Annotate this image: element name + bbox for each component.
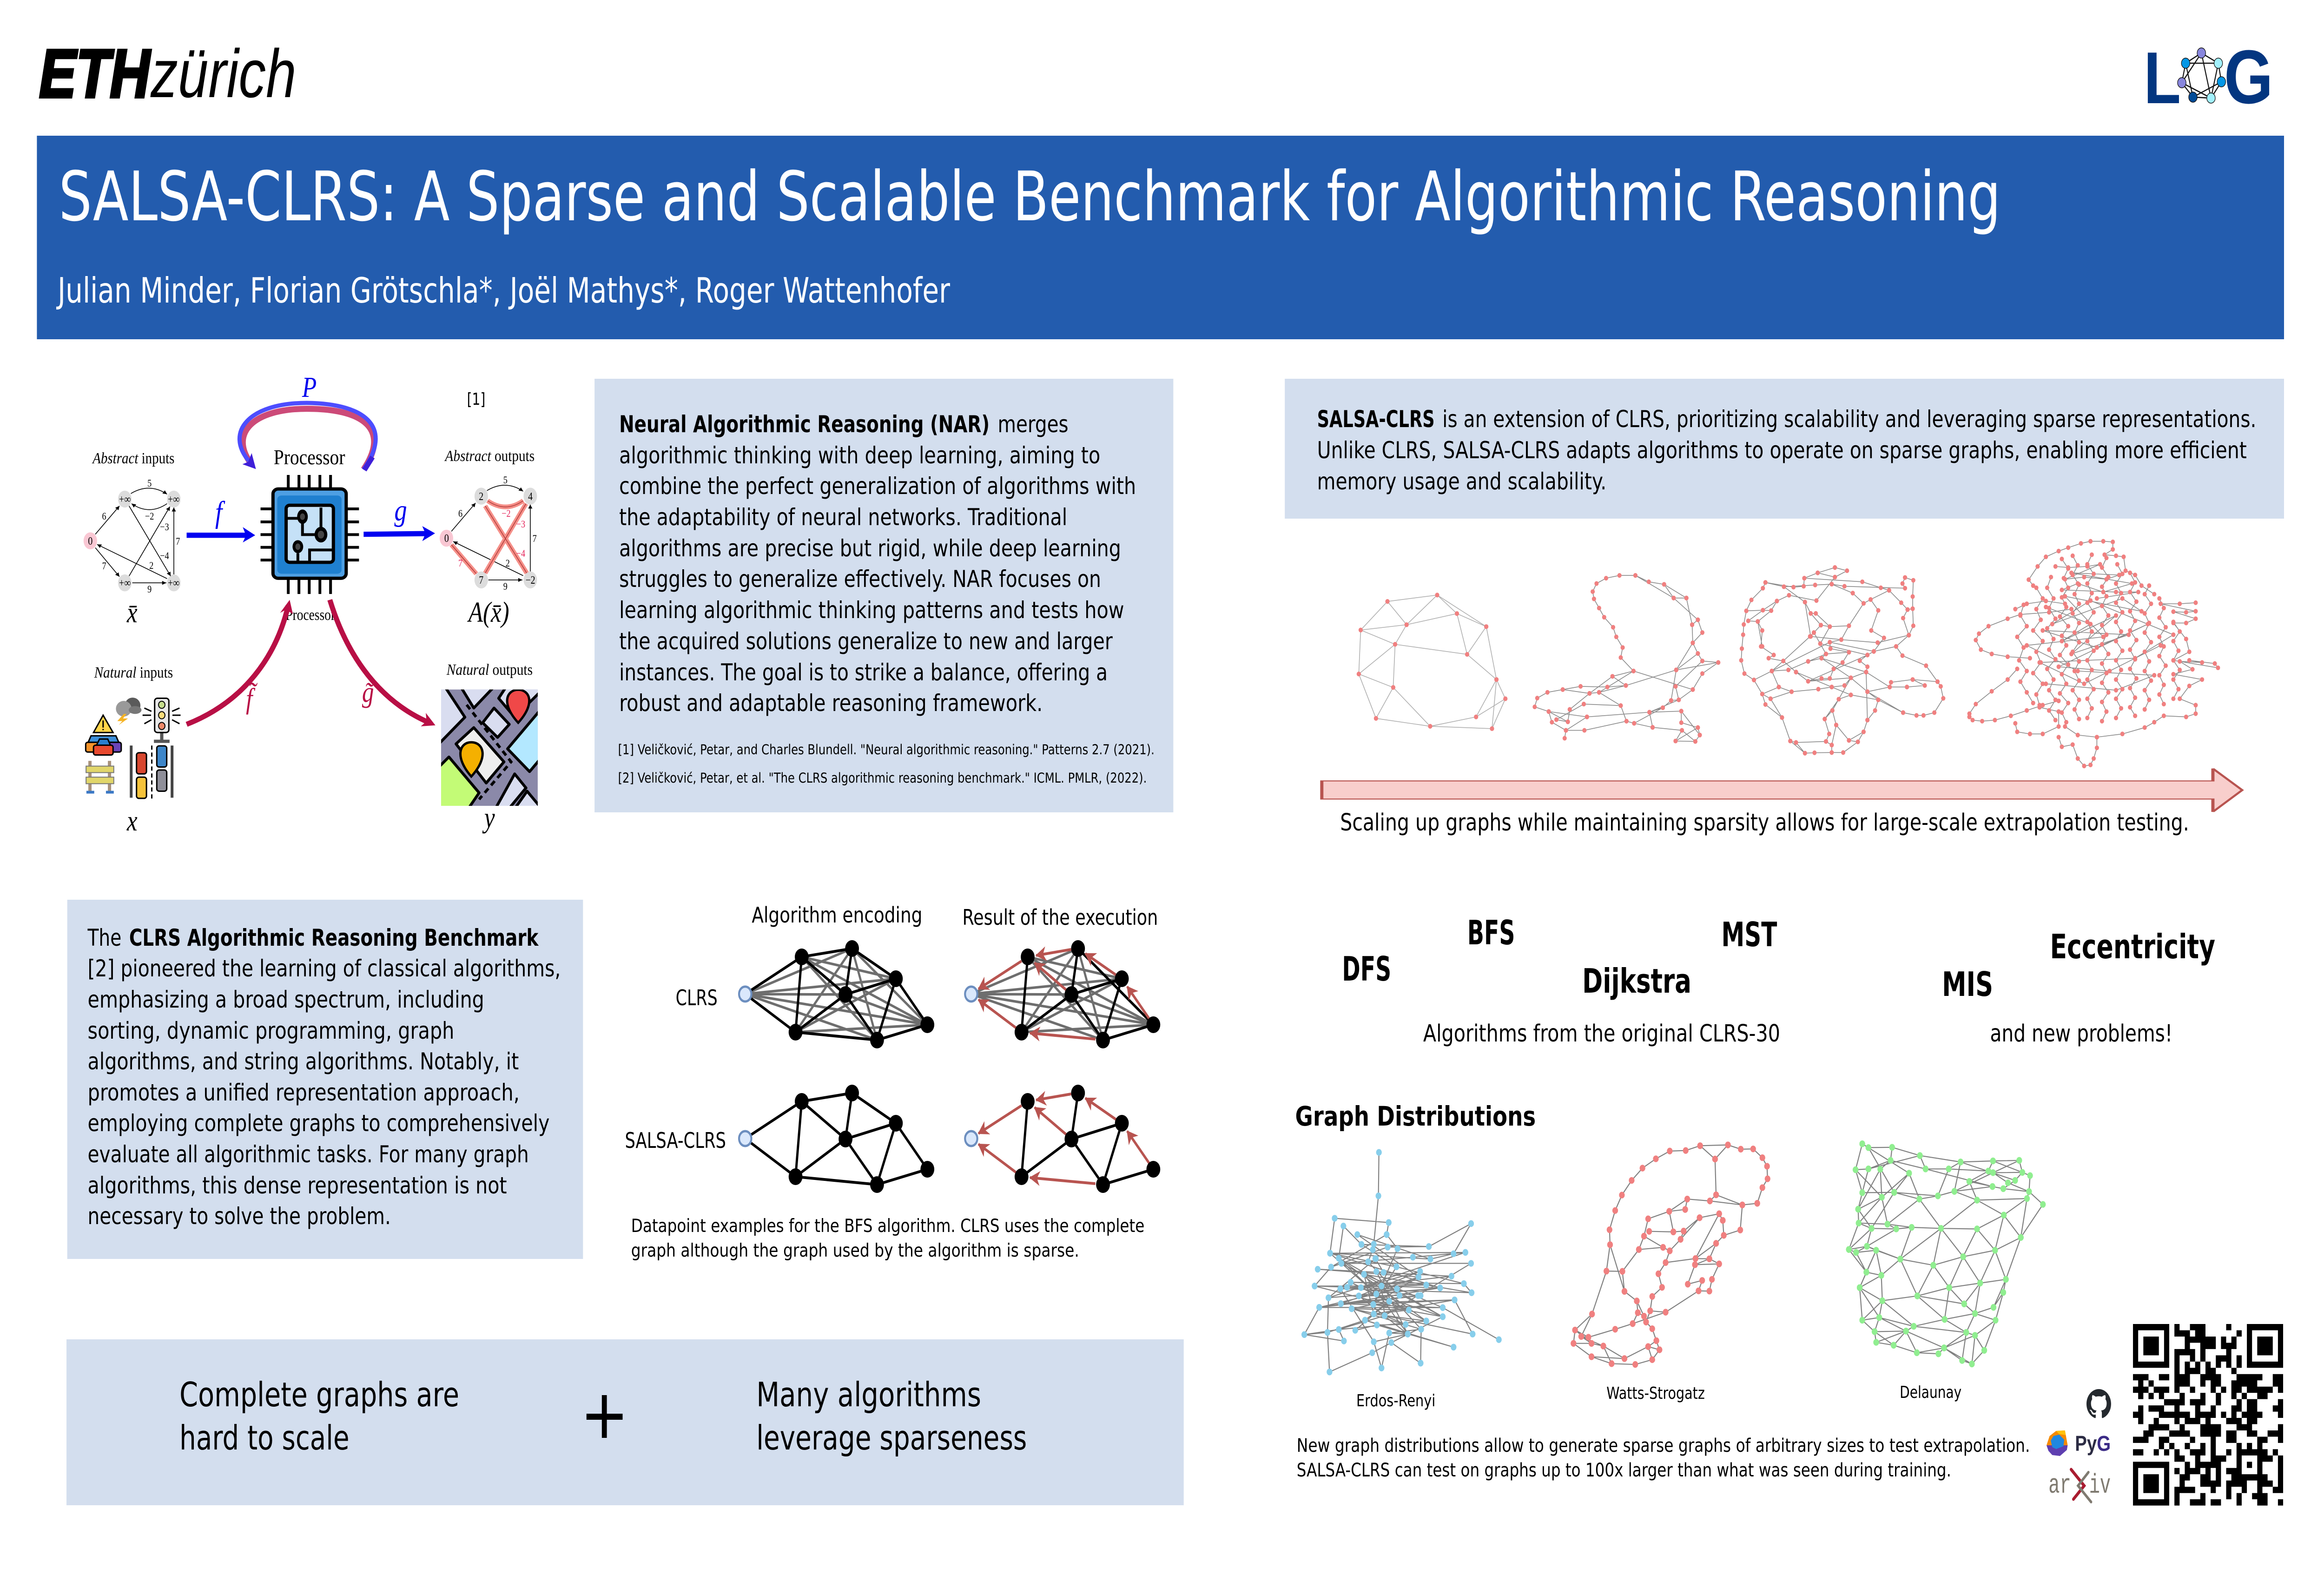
graph: Delaunay [1849,1144,2043,1364]
text labels of the diagram: f [215,495,225,529]
panel: neural algorithmic reasoning: algorithms are precise but rigid, while deep learning [619,534,1121,562]
panel: neural algorithmic reasoning: learning algorithmic thinking patterns and tests how [619,596,1124,624]
logo: LOG [2144,34,2273,119]
panel: takeaway: Complete graphs are [179,1376,459,1414]
graph edge labels: −2 [502,508,511,519]
panel: CLRS benchmark: employing complete graphs to comprehensively [88,1109,549,1137]
figure: graphs scaling up [1322,541,2242,837]
panel: CLRS benchmark: [2] pioneered the learning of classical algorithms, [88,955,561,982]
graph: abstract outputs [440,485,537,588]
text labels of the diagram: Abstract outputs [444,447,535,465]
arrow: f tilde [187,600,293,725]
graph edge labels: 7 [176,536,180,547]
algorithm names: new problems: MIS [1942,965,1993,1004]
icons: natural inputs [86,698,181,799]
text labels of the diagram: Abstract inputs [92,449,174,467]
logo: LOG: G [2224,34,2273,119]
text labels of the diagram: P [302,372,317,403]
graph edge labels: −3 [160,521,169,533]
panel: neural algorithmic reasoning: merges [998,410,1069,438]
logo: arXiv: iv [2089,1470,2111,1501]
text labels of the diagram: x [126,805,138,837]
panel: CLRS benchmark: emphasizing a broad spectrum, including [88,986,484,1013]
text labels of the diagram: Natural outputs [446,660,533,679]
algorithm names: CLRS-30: DFS [1342,950,1391,988]
icon: plus sign [587,1395,623,1438]
logo: PyG: PyG [2075,1432,2111,1456]
graph: Erdos-Renyi [1304,1153,1499,1372]
caption: graph distributions: New graph distributions allow to generate sparse graphs of arbitrary sizes to test extrapolation. [1297,1435,2030,1456]
graph edge labels: 7 [479,573,483,586]
panel: neural algorithmic reasoning: the adaptability of neural networks. Traditional [619,503,1067,531]
graph edge labels: 7 [458,558,462,569]
text labels of the diagram [92,372,535,837]
logo: ETH Zürich: zürich [150,35,297,112]
text labels of the diagram: g [394,494,407,527]
graph: largest [1969,541,2218,766]
graph edge labels: −4 [160,550,169,561]
panel: neural algorithmic reasoning: Neural Algorithmic Reasoning (NAR) [619,410,990,438]
shapes of the diagram [84,403,550,819]
graph edge labels: 6 [458,508,462,519]
arrow: g decoder [363,526,435,541]
graphs of increasing size [1359,541,2218,766]
caption [631,1216,1144,1261]
graph edge labels: −2 [145,511,154,522]
text labels of the diagram: f̃ [246,683,258,715]
graph edge labels: +∞ [119,576,131,589]
graph edge labels: 5 [503,474,508,486]
graph edge labels: −2 [526,573,535,586]
heading: graph distributions: Graph Distributions [1295,1101,1536,1132]
figure: BFS datapoint examples [625,902,1160,1261]
logo: ETH Zürich: ETH [39,35,151,112]
column and row labels: SALSA-CLRS [625,1128,726,1153]
title: SALSA-CLRS: A Sparse and Scalable Benchmark for Algorithmic Reasoning [59,157,2001,237]
graph: abstract inputs [84,488,181,591]
graph: medium [1741,567,1943,753]
icon: processor chip [261,475,359,594]
caption: Scaling up graphs while maintaining sparsity allows for large-scale extrapolation testing. [1340,809,2189,837]
panel: CLRS benchmark: necessary to solve the problem. [88,1202,391,1230]
panel: neural algorithmic reasoning: combine the perfect generalization of algorithms with [619,472,1136,500]
panel: CLRS benchmark: algorithms, this dense representation is not [88,1172,507,1199]
graph edge labels: 4 [528,490,533,502]
panel: CLRS benchmark: promotes a unified representation approach, [88,1079,520,1106]
graph edge labels: 2 [149,560,153,571]
graph edge labels: 0 [88,534,92,547]
text labels of the diagram: A(x̄) [467,597,509,628]
graph: SALSA-CLRS encoding [739,1085,934,1193]
graph: smallest [1359,595,1505,729]
text labels of the diagram: Processor [274,446,345,469]
QR code [2133,1327,2283,1502]
graph edge labels: 2 [506,558,510,569]
graph edge labels: +∞ [119,493,131,505]
algorithm names: CLRS-30: MST [1721,916,1777,954]
label: Delaunay: Delaunay [1900,1382,1961,1402]
panel: CLRS benchmark [67,900,583,1259]
icon: map with markers [441,690,538,806]
panel: neural algorithmic reasoning: instances. The goal is to strike a balance, offering a [619,659,1108,686]
panel: SALSA-CLRS intro: Unlike CLRS, SALSA-CLRS adapts algorithms to operate on sparse graphs, enabling more efficient [1317,436,2247,464]
algorithm names: CLRS-30 [1342,914,1780,1047]
authors: Julian Minder, Florian Grötschla*, Joël Mathys*, Roger Wattenhofer [56,270,951,311]
graph edge labels: −4 [516,548,525,559]
graph: Watts-Strogatz [1573,1145,1768,1364]
logo: ETH Zürich [39,35,297,112]
panel: CLRS benchmark: CLRS Algorithmic Reasoning Benchmark [129,924,539,951]
text labels of the diagram: Processor [285,606,336,624]
arrow: g tilde [330,600,436,726]
panel: takeaway: hard to scale [179,1419,350,1457]
graph edge labels: 6 [102,511,106,522]
panel: SALSA-CLRS intro: SALSA-CLRS [1317,405,1435,433]
graph edge labels: −3 [516,519,525,530]
panel: takeaway: Many algorithms [756,1376,981,1414]
graph edge labels: 5 [147,478,152,489]
graph: SALSA-CLRS execution result [965,1085,1160,1193]
logo: PyG [2047,1430,2111,1456]
algorithm names: CLRS-30: Dijkstra [1582,962,1691,1001]
references: [2] Veličković, Petar, et al. "The CLRS algorithmic reasoning benchmark." ICML. PMLR, (2022). [618,771,1147,786]
logo: arXiv: ar [2048,1470,2071,1501]
panel: SALSA-CLRS intro: is an extension of CLRS, prioritizing scalability and leveraging sparse representations. [1442,405,2256,433]
panel: neural algorithmic reasoning: the acquired solutions generalize to new and larger [619,627,1113,655]
panel: CLRS benchmark: The [87,924,121,951]
panel: neural algorithmic reasoning [594,379,1173,812]
graph edge labels: 7 [533,533,537,544]
graph edge labels: 2 [479,490,483,502]
text labels of the diagram: y [482,802,495,834]
arrow: scaling direction [1322,769,2242,812]
caption: graph distributions: SALSA-CLRS can test on graphs up to 100x larger than what was seen during training. [1297,1459,1951,1481]
column and row labels: Algorithm encoding [752,902,922,928]
text labels of the diagram: Natural inputs [94,663,173,681]
references [618,742,1155,786]
panel: SALSA-CLRS intro [1285,379,2284,519]
graph edge labels: 9 [147,584,152,595]
references: [1] Veličković, Petar, and Charles Blundell. "Neural algorithmic reasoning." Patterns 2.7 (2021). [618,742,1155,758]
panel: CLRS benchmark: algorithms, and string algorithms. Notably, it [88,1047,519,1075]
graph edge labels: 0 [444,532,449,544]
label: Watts-Strogatz: Watts-Strogatz [1606,1383,1705,1403]
logo: LOG: L [2144,37,2181,119]
graph edge labels: 7 [102,560,106,572]
text labels of the diagram: [1] [467,389,485,409]
graph edge labels: 9 [503,581,508,592]
column and row labels: Result of the execution [962,905,1158,930]
algorithm names: CLRS-30: Algorithms from the original CLRS-30 [1423,1020,1780,1047]
panel: CLRS benchmark: evaluate all algorithmic tasks. For many graph [88,1140,529,1168]
graph edge labels: +∞ [168,576,179,589]
text labels of the diagram: g̃ [362,677,374,708]
algorithm names: CLRS-30: BFS [1467,914,1515,952]
panel: SALSA-CLRS intro: memory usage and scalability. [1317,468,1606,495]
caption: graph distributions [1297,1435,2030,1481]
graph: CLRS execution result [965,940,1160,1048]
graph: CLRS encoding [739,940,934,1048]
arrow: processor loop P [239,403,376,470]
algorithm names: new problems: Eccentricity [2050,928,2215,966]
algorithm names: new problems [1942,928,2215,1047]
header banner [37,136,2284,339]
caption: Datapoint examples for the BFS algorithm. CLRS uses the complete [631,1216,1144,1237]
algorithm names: new problems: and new problems! [1990,1020,2172,1047]
caption: graph although the graph used by the algorithm is sparse. [631,1240,1079,1261]
panel: neural algorithmic reasoning: robust and adaptable reasoning framework. [619,689,1043,717]
icon: GitHub [2086,1389,2111,1418]
panel: neural algorithmic reasoning: struggles to generalize effectively. NAR focuses on [619,565,1101,593]
panel: takeaway [66,1339,1184,1505]
panel: takeaway: leverage sparseness [756,1419,1027,1457]
graph: small [1535,575,1718,741]
graph edge labels [88,474,537,595]
column and row labels [625,902,1158,1153]
panel: neural algorithmic reasoning: algorithmic thinking with deep learning, aiming to [619,441,1100,469]
column and row labels: CLRS [676,985,718,1010]
logo: arXiv [2048,1469,2111,1502]
graph edge labels: +∞ [168,493,179,505]
diagram: neural algorithmic reasoning blueprint [84,372,550,837]
arrow: f encoder [187,527,255,542]
text labels of the diagram: x̄ [126,597,138,629]
panel: CLRS benchmark: sorting, dynamic programming, graph [88,1017,454,1044]
label: Erdos-Renyi: Erdos-Renyi [1356,1390,1435,1410]
